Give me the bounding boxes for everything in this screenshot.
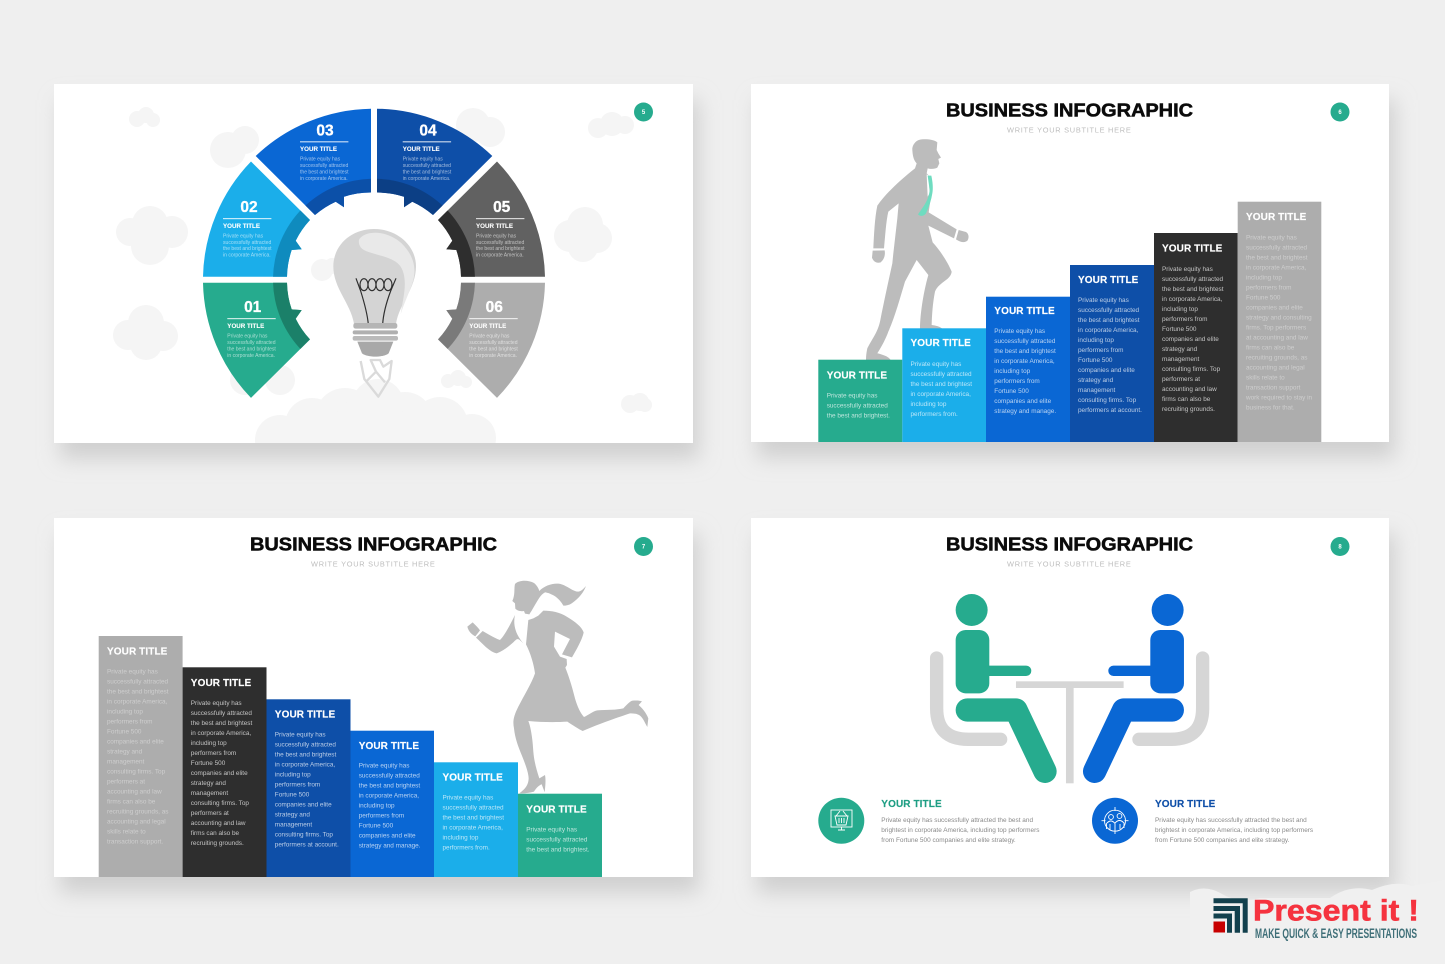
- icon: basket on monitor: [818, 798, 864, 844]
- label 06: [469, 299, 518, 359]
- step 4 dark blue: Private equity has: [1078, 297, 1129, 304]
- label 01: in corporate America.: [227, 353, 275, 359]
- step 1 grey: accounting and law: [107, 788, 162, 796]
- step 3 dark blue: YOUR TITLE: [275, 710, 335, 720]
- step 6 green: [518, 794, 602, 877]
- text block: left: brightest in corporate America, including top performers: [881, 827, 1039, 834]
- step 2 charcoal: accounting and law: [191, 820, 246, 827]
- label 04: [403, 122, 452, 182]
- step 1 grey: firms can also be: [107, 798, 156, 806]
- step 6 green: YOUR TITLE: [526, 804, 587, 816]
- panel: lightbulb wheel slide: [54, 84, 693, 475]
- step 5 charcoal: performers from: [1162, 316, 1207, 323]
- text block: left: from Fortune 500 companies and elite strategy.: [881, 837, 1016, 844]
- step 2 light blue: successfully attracted: [910, 371, 972, 378]
- step 3 blue: the best and brightest: [994, 348, 1056, 355]
- step 4 dark blue: consulting firms. Top: [1078, 397, 1137, 404]
- step 6 grey: Private equity has: [1246, 234, 1297, 242]
- step 4 blue: the best and brightest: [359, 782, 420, 790]
- step 5 charcoal: companies and elite: [1162, 336, 1219, 343]
- label 01: Private equity has: [227, 334, 268, 340]
- step 1 grey: YOUR TITLE: [107, 646, 168, 658]
- step 3 dark blue: performers at account.: [275, 841, 339, 848]
- step 4 dark blue: Fortune 500: [1078, 357, 1113, 364]
- step 4 blue: including top: [359, 802, 395, 810]
- step 6 grey: recruiting grounds, as: [1246, 354, 1307, 362]
- step 2 charcoal: successfully attracted: [191, 710, 252, 717]
- step 2 light blue: Private equity has: [910, 361, 961, 368]
- label 01: YOUR TITLE: [227, 323, 264, 330]
- step 4 blue: Fortune 500: [359, 822, 394, 830]
- text block: left: [881, 799, 1039, 844]
- label 03: 03: [316, 122, 334, 139]
- label 03: the best and brightest: [300, 169, 349, 175]
- step 5 charcoal: accounting and law: [1162, 386, 1217, 393]
- label 06: Private equity has: [469, 334, 510, 340]
- step 6 grey: performers from: [1246, 284, 1291, 292]
- step 1 green: the best and brightest.: [827, 412, 890, 420]
- step 4 blue: strategy and manage.: [359, 842, 421, 850]
- label 01: successfully attracted: [227, 340, 276, 346]
- icon: walking businessman silhouette: [866, 139, 969, 360]
- label 03: YOUR TITLE: [300, 146, 337, 153]
- step 1 green: Private equity has: [827, 392, 878, 400]
- step 1 grey: transaction support.: [107, 838, 163, 846]
- step 3 dark blue: strategy and: [275, 811, 310, 818]
- step 3 dark blue: Private equity has: [275, 731, 326, 738]
- step 2 charcoal: consulting firms. Top: [191, 800, 249, 807]
- step 2 light blue: in corporate America,: [910, 391, 971, 398]
- step 5 light blue: [434, 762, 518, 877]
- step 3 blue: in corporate America,: [994, 358, 1055, 365]
- title: BUSINESS INFOGRAPHIC: [946, 100, 1193, 120]
- label 05: Private equity has: [476, 234, 517, 240]
- step 4 blue: successfully attracted: [359, 772, 420, 780]
- step 6 grey: strategy and consulting: [1246, 314, 1312, 322]
- panel: climbing man slide: [751, 84, 1389, 442]
- step 5 light blue: YOUR TITLE: [442, 772, 503, 784]
- badge 8: [1330, 537, 1350, 556]
- step 3 blue: Fortune 500: [994, 388, 1029, 395]
- panel: running woman slide: [54, 518, 693, 877]
- step 4 dark blue: performers from: [1078, 347, 1123, 354]
- step 2 light blue: the best and brightest: [910, 381, 972, 388]
- step 3 dark blue: including top: [275, 771, 311, 778]
- label 04: in corporate America.: [403, 176, 450, 182]
- step 6 grey: skills relate to: [1246, 374, 1285, 382]
- title: BUSINESS INFOGRAPHIC: [946, 534, 1193, 554]
- badge 6: [1330, 102, 1350, 122]
- step 2 charcoal: companies and elite: [191, 770, 248, 777]
- subtitle: WRITE YOUR SUBTITLE HERE: [1007, 126, 1132, 134]
- step 5 charcoal: Fortune 500: [1162, 326, 1197, 333]
- step 4 dark blue: successfully attracted: [1078, 307, 1140, 314]
- step 5 light blue: performers from.: [442, 845, 490, 852]
- label 04: 04: [419, 122, 437, 139]
- step 6 grey: firms. Top performers: [1246, 324, 1306, 332]
- segment 04: [377, 108, 492, 215]
- label 03: Private equity has: [300, 156, 341, 162]
- text block: left: YOUR TITLE: [881, 799, 942, 810]
- step 1 grey: [99, 636, 183, 877]
- step 3 blue: successfully attracted: [994, 338, 1056, 345]
- step 5 charcoal: consulting firms. Top: [1162, 366, 1221, 373]
- step 5 charcoal: YOUR TITLE: [1162, 244, 1223, 255]
- label 05: YOUR TITLE: [476, 223, 513, 230]
- label 06: in corporate America.: [469, 353, 517, 359]
- step 2 light blue: [902, 328, 986, 442]
- step 6 grey: successfully attracted: [1246, 244, 1308, 252]
- step 6 grey: the best and brightest: [1246, 254, 1308, 262]
- step 6 grey: transaction support: [1246, 384, 1301, 392]
- badge 5: 5: [642, 110, 646, 116]
- step 1 grey: companies and elite: [107, 738, 164, 746]
- step 1 green: YOUR TITLE: [827, 370, 887, 382]
- step 1 grey: Fortune 500: [107, 728, 142, 736]
- badge 6: 6: [1338, 110, 1342, 116]
- step 5 charcoal: the best and brightest: [1162, 286, 1224, 293]
- text block: right: [1155, 799, 1313, 844]
- label 03: successfully attracted: [300, 163, 348, 169]
- label 05: 05: [493, 199, 511, 216]
- step 4 dark blue: companies and elite: [1078, 367, 1135, 374]
- step 2 charcoal: firms can also be: [191, 830, 240, 837]
- step 4 dark blue: performers at account.: [1078, 407, 1142, 414]
- step 5 charcoal: in corporate America,: [1162, 296, 1223, 303]
- label 03: in corporate America.: [300, 176, 348, 182]
- step 1 grey: the best and brightest: [107, 688, 169, 696]
- step 3 dark blue: consulting firms. Top: [275, 831, 333, 838]
- step 2 charcoal: management: [191, 790, 228, 797]
- label 05: [476, 199, 525, 258]
- label 04: successfully attracted: [403, 163, 451, 169]
- step 6 grey: [1238, 202, 1321, 442]
- step 4 dark blue: including top: [1078, 337, 1114, 344]
- label 02: in corporate America.: [223, 252, 271, 258]
- step 5 charcoal: recruiting grounds.: [1162, 406, 1215, 413]
- badge 7: [634, 537, 653, 556]
- subtitle: WRITE YOUR SUBTITLE HERE: [311, 560, 436, 568]
- step 2 charcoal: performers at: [191, 810, 229, 817]
- label 05: the best and brightest: [476, 246, 525, 252]
- label 03: [300, 122, 349, 182]
- step 4 blue: [350, 731, 434, 877]
- step 4 dark blue: strategy and: [1078, 377, 1114, 384]
- text block: right: from Fortune 500 companies and elite strategy.: [1155, 837, 1290, 844]
- step 4 dark blue: YOUR TITLE: [1078, 275, 1139, 286]
- step 1 green: [818, 360, 902, 442]
- step 1 grey: accounting and legal: [107, 818, 166, 826]
- step 6 green: successfully attracted: [526, 837, 588, 844]
- step 5 light blue: the best and brightest: [442, 815, 504, 822]
- label 06: the best and brightest: [469, 346, 518, 352]
- step 5 charcoal: management: [1162, 356, 1200, 363]
- segment 01: [203, 282, 310, 398]
- segment 05: [438, 162, 545, 277]
- badge 5: [634, 102, 653, 122]
- label 04: the best and brightest: [403, 169, 452, 175]
- step 3 blue: [986, 297, 1070, 442]
- step 5 charcoal: successfully attracted: [1162, 276, 1224, 283]
- label 02: successfully attracted: [223, 240, 271, 246]
- subtitle: WRITE YOUR SUBTITLE HERE: [1007, 560, 1132, 568]
- step 2 light blue: YOUR TITLE: [910, 338, 971, 349]
- label 02: the best and brightest: [223, 246, 272, 252]
- logo: Present it: Present it !: [1253, 894, 1419, 928]
- label 04: YOUR TITLE: [403, 146, 440, 153]
- text block: right: Private equity has successfully attracted the best and: [1155, 817, 1307, 824]
- illustration: two people seated at a table: [937, 594, 1203, 783]
- step 1 grey: successfully attracted: [107, 678, 169, 686]
- segment 02: [203, 162, 310, 277]
- step 2 charcoal: performers from: [191, 750, 236, 757]
- step 1 grey: Private equity has: [107, 668, 158, 676]
- icon: light bulb: [333, 229, 416, 397]
- step 1 grey: performers at: [107, 778, 145, 786]
- step 2 charcoal: Private equity has: [191, 700, 242, 707]
- icon: logo mark: [1214, 898, 1248, 933]
- step 5 charcoal: including top: [1162, 306, 1198, 313]
- step 3 dark blue: successfully attracted: [275, 741, 336, 748]
- label 05: successfully attracted: [476, 240, 524, 246]
- text block: right: YOUR TITLE: [1155, 799, 1216, 810]
- step 4 blue: in corporate America,: [359, 792, 419, 800]
- step 2 charcoal: recruiting grounds.: [191, 840, 244, 847]
- step 5 light blue: successfully attracted: [442, 805, 504, 812]
- step 1 grey: in corporate America,: [107, 698, 168, 706]
- label 01: [227, 299, 276, 359]
- step 6 green: the best and brightest.: [526, 847, 590, 854]
- step 3 blue: including top: [994, 368, 1031, 375]
- step 1 grey: including top: [107, 708, 143, 716]
- label 04: Private equity has: [403, 156, 443, 162]
- step 2 charcoal: [183, 667, 266, 877]
- step 3 blue: Private equity has: [994, 328, 1045, 335]
- step 6 grey: companies and elite: [1246, 304, 1303, 312]
- step 6 grey: accounting and legal: [1246, 364, 1305, 372]
- step 5 charcoal: [1154, 233, 1238, 442]
- step 6 grey: Fortune 500: [1246, 294, 1281, 302]
- step 2 charcoal: Fortune 500: [191, 760, 226, 767]
- step 2 charcoal: YOUR TITLE: [191, 678, 251, 689]
- label 05: in corporate America.: [476, 252, 524, 258]
- text block: right: brightest in corporate America, including top performers: [1155, 827, 1313, 834]
- label 06: successfully attracted: [469, 340, 518, 346]
- step 3 dark blue: in corporate America,: [275, 761, 335, 768]
- step 3 dark blue: companies and elite: [275, 801, 332, 808]
- background clouds: [113, 107, 652, 475]
- step 3 dark blue: performers from: [275, 781, 320, 788]
- step 1 grey: recruiting grounds, as: [107, 808, 168, 816]
- step 3 blue: companies and elite: [994, 398, 1052, 405]
- segment 03: [256, 108, 371, 215]
- step 3 dark blue: the best and brightest: [275, 751, 336, 758]
- step 4 blue: Private equity has: [359, 762, 410, 770]
- step 4 dark blue: management: [1078, 387, 1116, 394]
- step 1 green: successfully attracted: [827, 402, 888, 410]
- step 6 grey: including top: [1246, 274, 1282, 282]
- logo: Present it: [1214, 894, 1419, 941]
- step 1 grey: performers from: [107, 718, 152, 726]
- label 06: 06: [486, 299, 503, 316]
- step 3 dark blue: [266, 699, 350, 877]
- step 5 charcoal: strategy and: [1162, 346, 1198, 353]
- step 2 charcoal: the best and brightest: [191, 720, 252, 727]
- step 2 light blue: performers from.: [910, 411, 958, 418]
- label 06: YOUR TITLE: [469, 323, 506, 330]
- step 3 dark blue: Fortune 500: [275, 791, 310, 798]
- step 1 grey: consulting firms. Top: [107, 768, 166, 776]
- step 2 light blue: including top: [910, 401, 947, 408]
- badge 8: 8: [1338, 545, 1342, 551]
- panel: two people at table slide: [751, 518, 1389, 877]
- step 5 light blue: including top: [442, 835, 479, 842]
- step 5 charcoal: performers at: [1162, 376, 1200, 383]
- segment 06: [438, 282, 545, 398]
- step 4 dark blue: in corporate America,: [1078, 327, 1139, 334]
- step 6 grey: firms can also be: [1246, 344, 1295, 352]
- step 3 blue: performers from: [994, 378, 1040, 385]
- step 2 charcoal: including top: [191, 740, 227, 747]
- step 1 grey: skills relate to: [107, 828, 146, 836]
- step 5 charcoal: Private equity has: [1162, 266, 1213, 273]
- step 4 blue: YOUR TITLE: [359, 741, 419, 752]
- step 2 charcoal: strategy and: [191, 780, 226, 787]
- label 02: Private equity has: [223, 234, 264, 240]
- step 6 grey: at accounting and law: [1246, 334, 1308, 342]
- step 1 grey: strategy and: [107, 748, 143, 756]
- step 1 grey: management: [107, 758, 145, 766]
- step 5 light blue: in corporate America,: [442, 825, 503, 832]
- text block: left: Private equity has successfully attracted the best and: [881, 817, 1033, 824]
- step 4 dark blue: [1070, 265, 1154, 442]
- step 6 grey: in corporate America,: [1246, 264, 1307, 272]
- step 6 grey: business for that.: [1246, 404, 1295, 412]
- icon: people in target: [1092, 798, 1138, 844]
- step 5 light blue: Private equity has: [442, 795, 493, 802]
- step 3 blue: YOUR TITLE: [994, 306, 1055, 317]
- label 02: [223, 199, 272, 258]
- step 6 green: Private equity has: [526, 827, 577, 834]
- step 4 blue: companies and elite: [359, 832, 416, 840]
- step 3 dark blue: management: [275, 821, 312, 828]
- label 02: YOUR TITLE: [223, 223, 260, 230]
- icon: running businesswoman silhouette: [467, 581, 648, 793]
- label 01: 01: [244, 299, 262, 316]
- step 3 blue: strategy and manage.: [994, 408, 1056, 415]
- badge 7: 7: [642, 545, 646, 551]
- label 01: the best and brightest: [227, 346, 276, 352]
- step 4 blue: performers from: [359, 812, 404, 820]
- label 02: 02: [240, 199, 258, 216]
- title: BUSINESS INFOGRAPHIC: [250, 534, 497, 554]
- step 6 grey: YOUR TITLE: [1246, 212, 1307, 223]
- step 4 dark blue: the best and brightest: [1078, 317, 1140, 324]
- step 2 charcoal: in corporate America,: [191, 730, 251, 737]
- step 5 charcoal: firms can also be: [1162, 396, 1211, 403]
- step 6 grey: work required to stay in: [1245, 394, 1313, 402]
